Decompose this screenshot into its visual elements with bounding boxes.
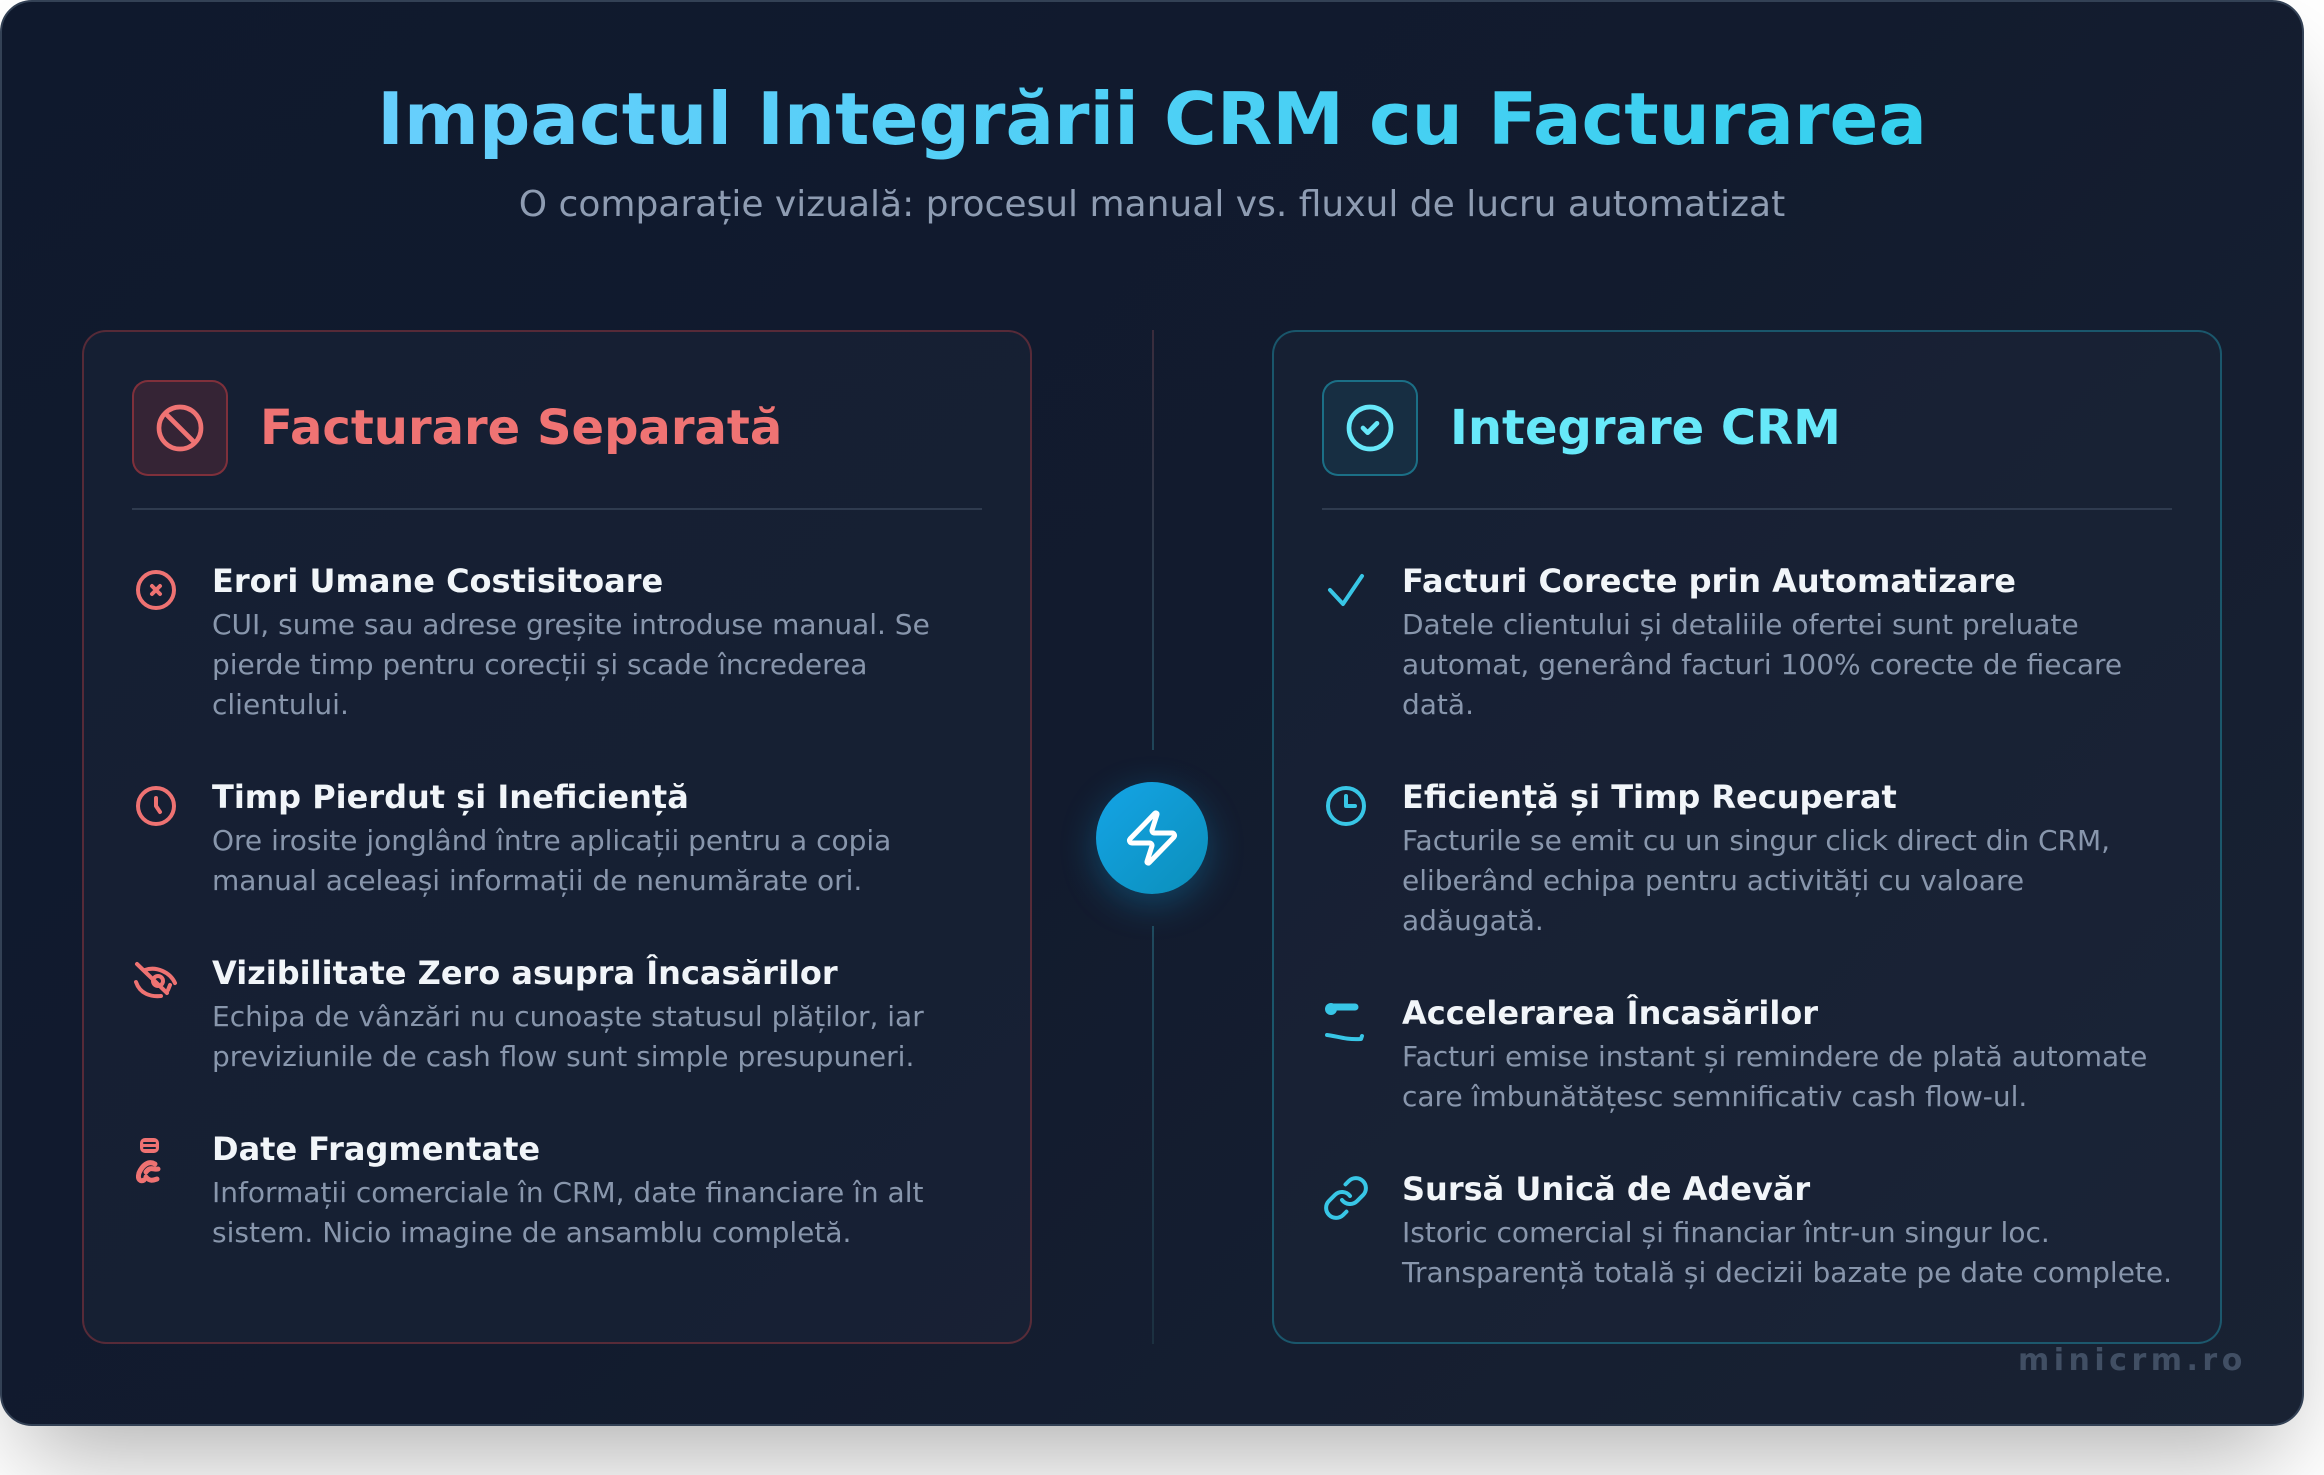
title: Impactul Integrării CRM cu Facturarea (377, 77, 1927, 161)
item: Timp Pierdut și Ineficiență (136, 778, 891, 897)
item: Date Fragmentate (136, 1130, 923, 1249)
icon: eye off (134, 962, 178, 998)
item description (1402, 1040, 2147, 1113)
item: Erori Umane Costisitoare (136, 562, 930, 721)
center bolt badge (1096, 782, 1208, 894)
panel: Facturare Separată (82, 330, 1032, 1344)
item description: adăugată. (1402, 904, 1544, 937)
item title: Eficiență și Timp Recuperat (1402, 778, 1897, 816)
item description (212, 1000, 924, 1073)
item title: Facturi Corecte prin Automatizare (1402, 562, 2016, 600)
item description: Facturile se emit cu un singur click direct din CRM, (1402, 824, 2110, 857)
item description (212, 824, 891, 897)
item description: pierde timp pentru corecții și scade încrederea (212, 648, 867, 681)
item description: Istoric comercial și financiar într-un singur loc. (1402, 1216, 2050, 1249)
item description: care îmbunătățesc semnificativ cash flow-ul. (1402, 1080, 2027, 1113)
watermark: minicrm.ro (2018, 1343, 2247, 1378)
panel: Integrare CRM (1272, 330, 2222, 1344)
item description (1402, 608, 2122, 721)
icon: ban (132, 380, 228, 476)
item description: Facturi emise instant și remindere de plată automate (1402, 1040, 2147, 1073)
icon: fragmented data (136, 1138, 160, 1184)
heading: Integrare CRM: Integrare CRM (1450, 400, 1841, 456)
icon: acceleration (1325, 1003, 1364, 1042)
item: Facturi Corecte prin Automatizare (1328, 562, 2122, 721)
subtitle: O comparație vizuală: procesul manual vs. fluxul de lucru automatizat (519, 184, 1785, 225)
item: Eficiență și Timp Recuperat (1326, 778, 2110, 937)
item description: previziunile de cash flow sunt simple presupuneri. (212, 1040, 914, 1073)
item description: Datele clientului și detaliile ofertei sunt preluate (1402, 608, 2079, 641)
icon: link (1324, 1176, 1368, 1220)
item description: Ore irosite jonglând între aplicații pentru a copia (212, 824, 891, 857)
item description: clientului. (212, 688, 349, 721)
item description: sistem. Nicio imagine de ansamblu completă. (212, 1216, 851, 1249)
item description (1402, 1216, 2172, 1289)
item: Accelerarea Încasărilor (1325, 994, 2147, 1113)
item description: CUI, sume sau adrese greșite introduse manual. Se (212, 608, 930, 641)
item description: Transparență totală și decizii bazate pe date complete. (1402, 1256, 2172, 1289)
item description: manual aceleași informații de nenumărate ori. (212, 864, 862, 897)
item description (212, 1176, 923, 1249)
item description (1402, 824, 2110, 937)
item description: Echipa de vânzări nu cunoaște statusul plăților, iar (212, 1000, 924, 1033)
item description: dată. (1402, 688, 1474, 721)
item title: Sursă Unică de Adevăr (1402, 1170, 1810, 1208)
item description: Informații comerciale în CRM, date financiare în alt (212, 1176, 923, 1209)
item title: Vizibilitate Zero asupra Încasărilor (212, 954, 838, 992)
item title: Accelerarea Încasărilor (1402, 994, 1818, 1032)
connector line bottom (1152, 926, 1154, 1344)
item description: eliberând echipa pentru activități cu valoare (1402, 864, 2024, 897)
item: Vizibilitate Zero (134, 954, 924, 1073)
item title: Date Fragmentate (212, 1130, 540, 1168)
icon: clock (136, 786, 176, 826)
icon: x circle (136, 570, 176, 610)
heading: Facturare Separată: Facturare Separată (260, 400, 782, 456)
icon: lightning bolt (1126, 810, 1178, 866)
item description: automat, generând facturi 100% corecte de fiecare (1402, 648, 2122, 681)
icon: check (1328, 574, 1364, 606)
item title: Timp Pierdut și Ineficiență (212, 778, 689, 816)
item description (212, 608, 930, 721)
item: Sursă Unică de Adevăr (1324, 1170, 2172, 1289)
icon: check circle (1322, 380, 1418, 476)
connector line top (1152, 330, 1154, 750)
icon: clock (1326, 786, 1366, 826)
item title: Erori Umane Costisitoare (212, 562, 663, 600)
